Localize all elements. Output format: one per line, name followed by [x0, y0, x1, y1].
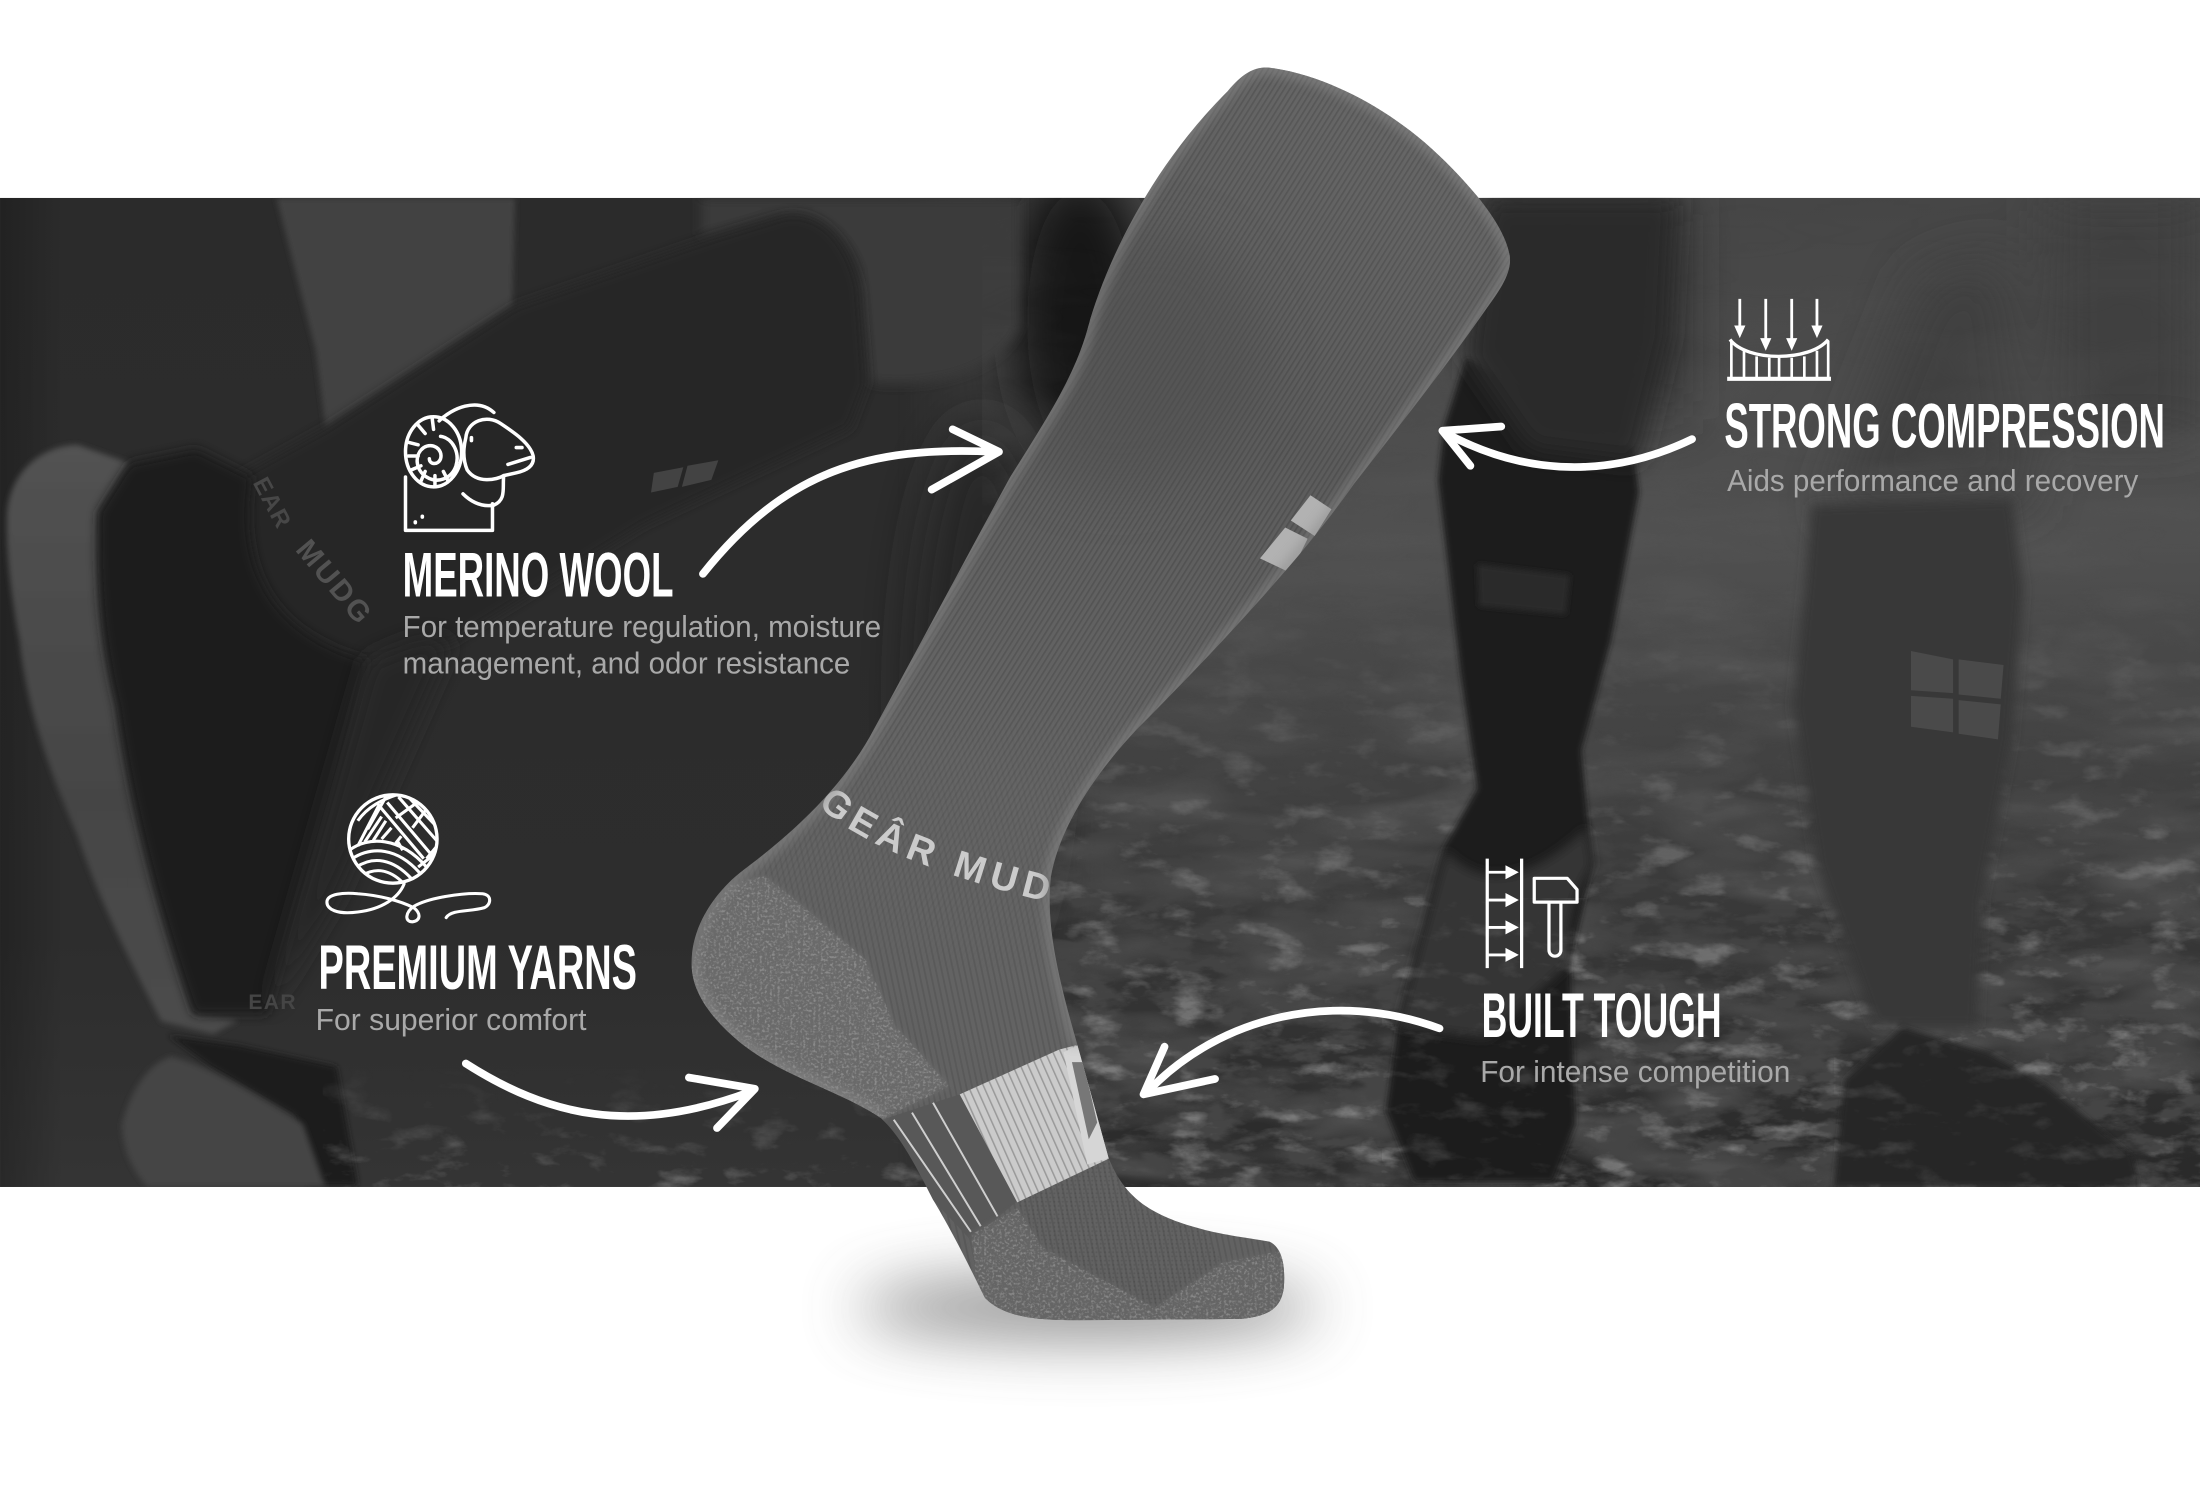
sock: lighter silhouette edge	[692, 67, 1510, 1118]
arrow: strong compression to calf	[1442, 427, 1692, 467]
heading: BUILT TOUGH	[1482, 981, 1722, 1051]
sock: heel terry	[688, 876, 950, 1121]
left runner: calf sock	[328, 214, 862, 428]
photo banner: runners on a trail	[0, 168, 2200, 1193]
heading: PREMIUM YARNS	[319, 933, 637, 1003]
arrow: merino wool to calf	[703, 429, 999, 574]
icon: wall and hammer	[1487, 859, 1577, 968]
sock: midfoot mesh	[1017, 1158, 1222, 1308]
feature: merino wool	[403, 405, 881, 680]
feature: built tough	[1480, 859, 1790, 1089]
feature: strong compression	[1724, 299, 2165, 498]
description: Aids performance and recovery	[1727, 465, 2139, 498]
right runner B: calf sock	[1793, 499, 2023, 1027]
product: compression sock	[692, 68, 1510, 1320]
description line 2: management, and odor resistance	[403, 647, 850, 680]
heading: MERINO WOOL	[403, 540, 673, 610]
sock: band logo	[1064, 1045, 1111, 1165]
right runner shoes: surface texture	[1382, 898, 2135, 1187]
icon: ram	[405, 405, 533, 530]
background ground left	[323, 1086, 923, 1187]
left runner: sock lettering: MUDG	[289, 533, 380, 632]
icon: yarn ball	[327, 794, 490, 922]
feature: premium yarns	[316, 794, 637, 1037]
sock: calf logo	[1260, 495, 1332, 571]
description: For temperature regulation, moisture	[403, 611, 881, 644]
left runner: lower sock	[402, 657, 410, 660]
right runner B: sock logo	[1911, 651, 2004, 739]
description: For intense competition	[1480, 1056, 1790, 1089]
left runner: upper sock lettering: EAR	[247, 473, 297, 534]
arrow: premium yarns to heel	[466, 1064, 755, 1128]
left runner: back leg skin	[702, 198, 1020, 383]
left runner: sock logo	[651, 460, 718, 492]
right runner A: sock logo	[1477, 564, 1570, 615]
arrow: built tough to midfoot	[1143, 1011, 1440, 1094]
right runner B: shoe	[1834, 1027, 2140, 1187]
right side: trail ground texture	[982, 414, 2200, 1187]
sock: woven lettering: GEÂR MUD	[823, 790, 1049, 899]
sock: toe terry	[971, 1208, 1291, 1326]
right side: fog and ridge	[1487, 198, 2200, 519]
right runner A: leg and shoe	[1386, 358, 1639, 1181]
left runner: shoe upper	[98, 449, 368, 1014]
sock: white striped band	[960, 1045, 1111, 1202]
left runner: lower sock lettering: EAR	[248, 991, 297, 1014]
sock: dark band with thin lines	[878, 1094, 1017, 1240]
description: For superior comfort	[316, 1004, 587, 1037]
right runner A: shoe lacing highlight	[1397, 828, 1592, 1038]
right runner A: upper leg	[1466, 198, 1677, 463]
left runner: trailing shoe	[122, 1056, 326, 1187]
left runner: shoe sole	[7, 445, 239, 1034]
sock floor shadow	[856, 1277, 1319, 1339]
icon: compression	[1727, 299, 1831, 379]
left runner: thigh skin	[276, 198, 515, 428]
left runner: trailing ankle	[168, 1035, 358, 1186]
